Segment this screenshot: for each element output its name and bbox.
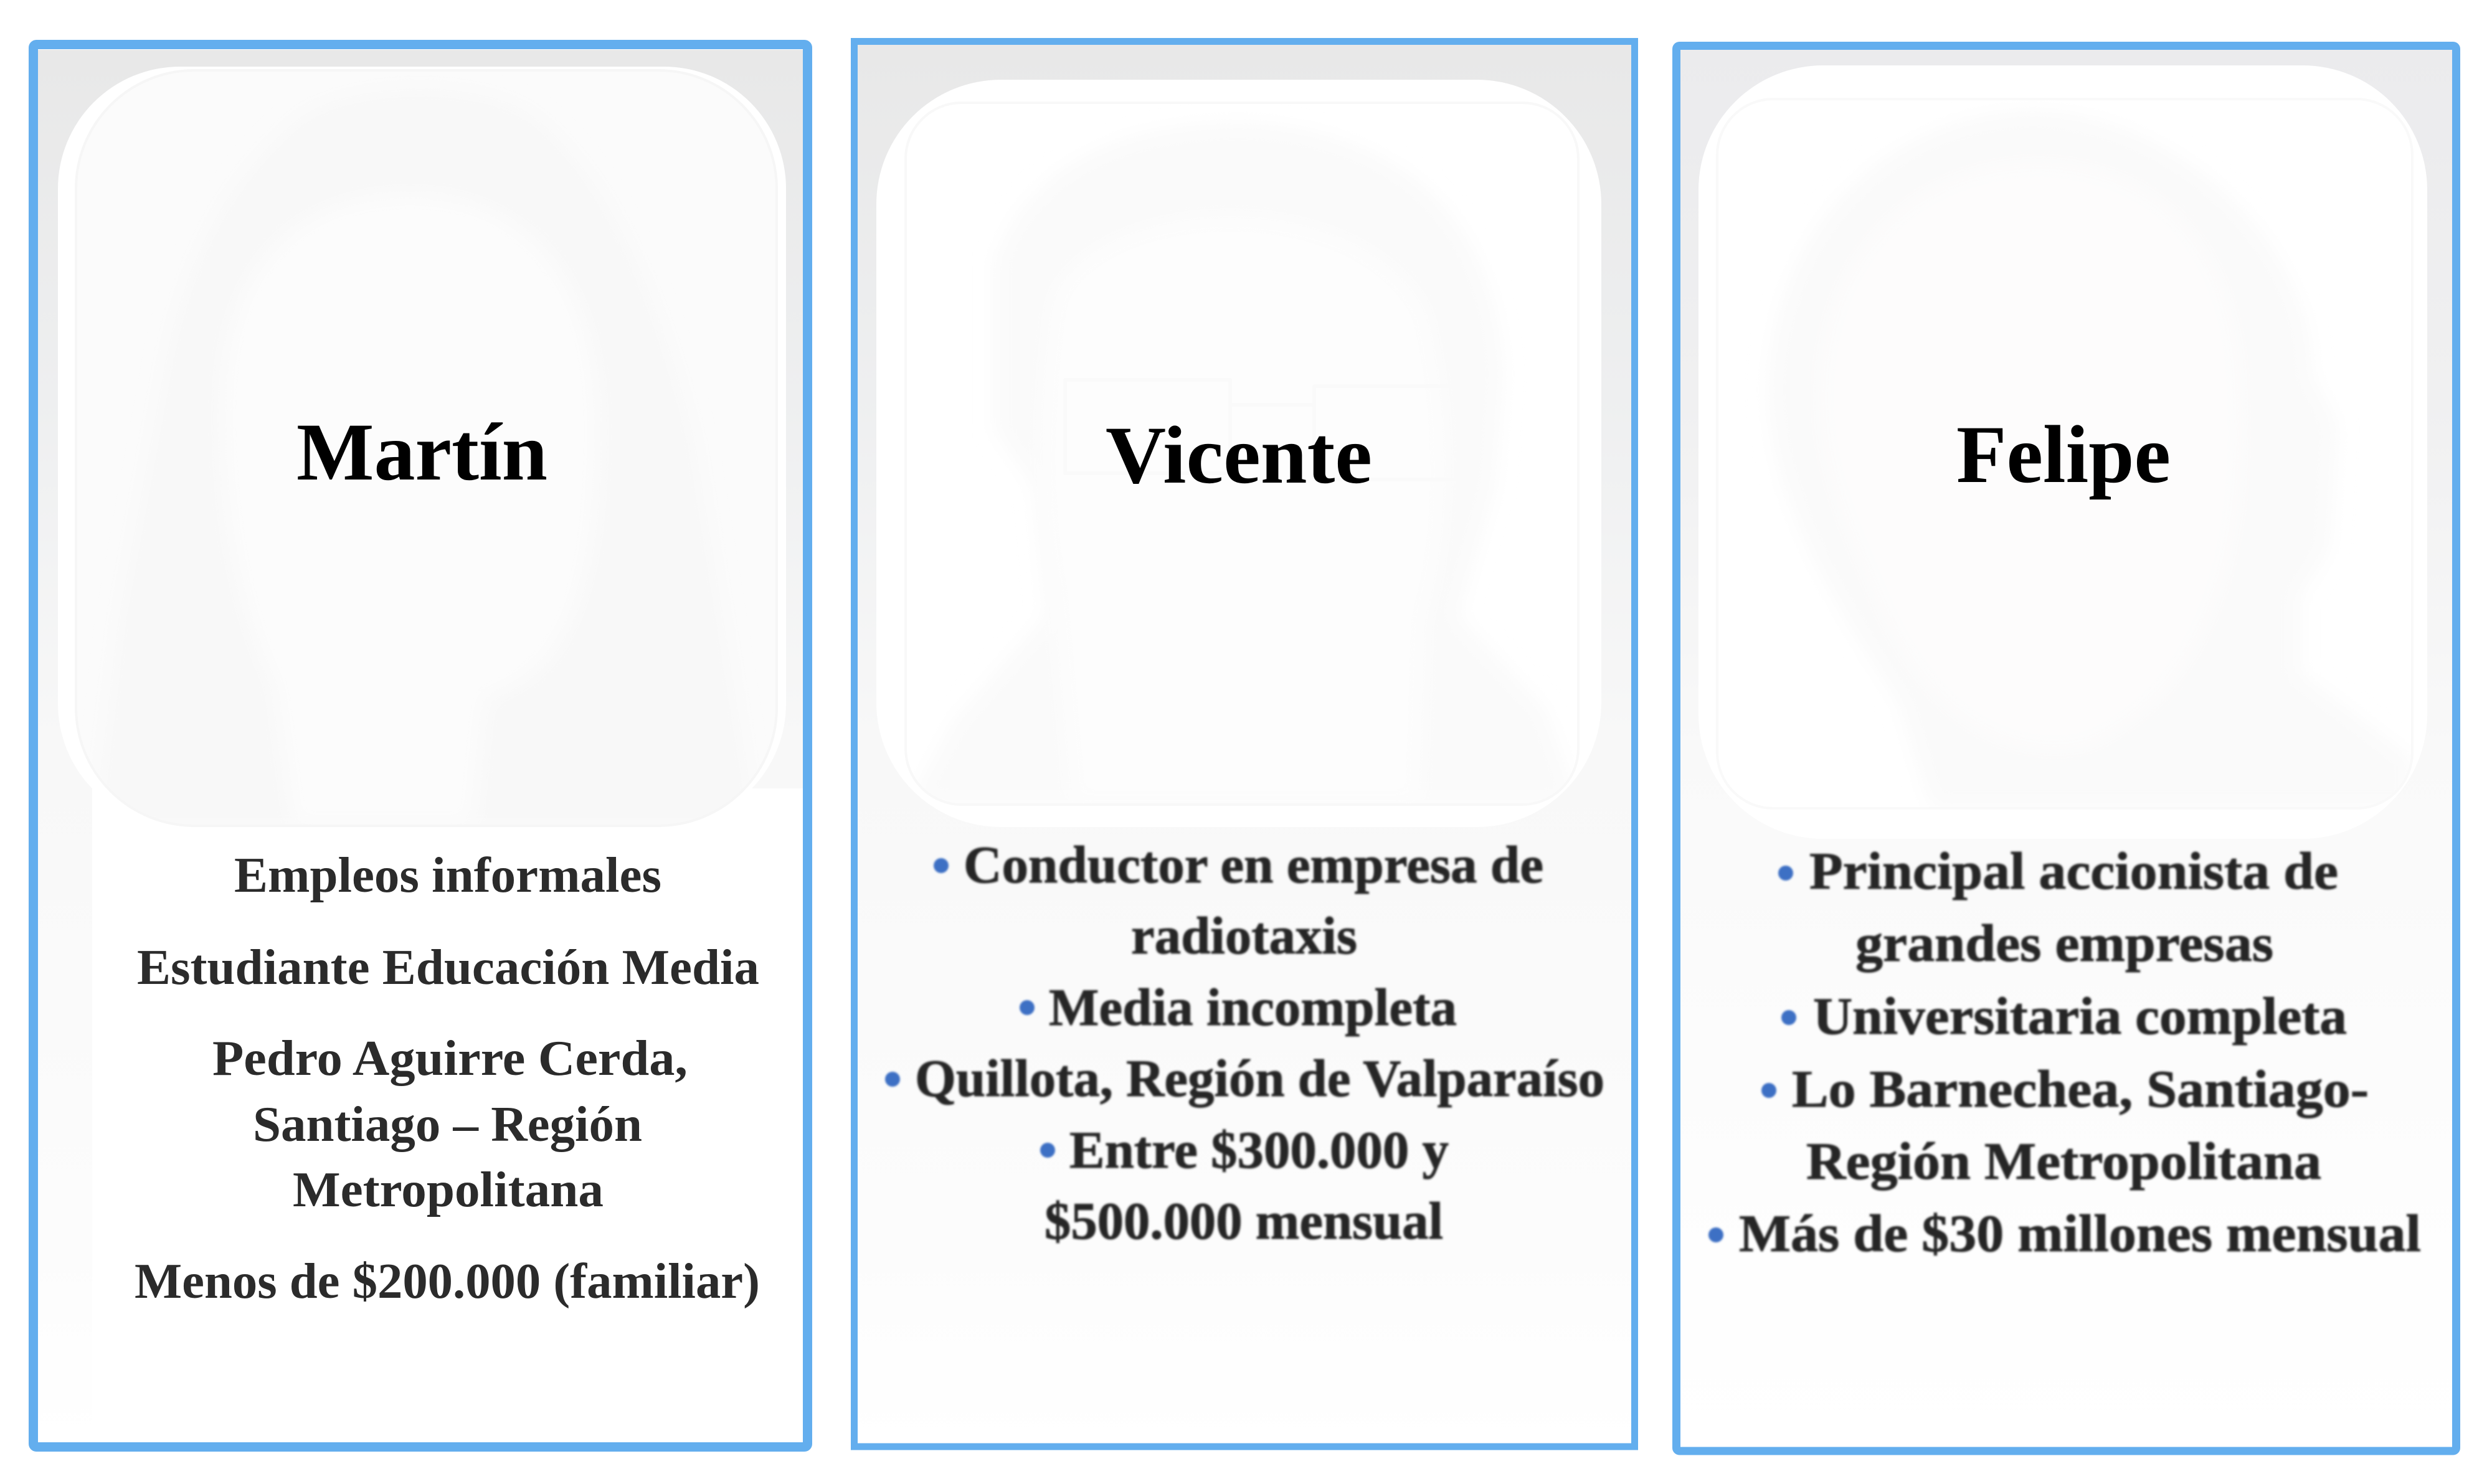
text block: Martín details: Empleos informales	[234, 847, 661, 903]
name: Vicente: Vicente	[1106, 409, 1372, 501]
text block: Felipe details: Más de $30 millones mensual	[1739, 1204, 2421, 1263]
photo frame line	[76, 70, 777, 826]
faded portrait	[76, 70, 777, 826]
text block: Vicente details	[885, 836, 1604, 1250]
text block: Felipe details: Región Metropolitana	[1806, 1132, 2321, 1191]
faded portrait	[906, 103, 1578, 805]
panel background	[37, 50, 803, 1443]
text block: Martín details	[135, 847, 760, 1309]
photo halo	[876, 80, 1601, 827]
text block: Martín details: Santiago – Región	[253, 1096, 642, 1152]
text block: Vicente details: Entre $300.000 y	[1069, 1121, 1449, 1179]
panel background	[854, 41, 1635, 1447]
panel border	[855, 41, 1634, 1447]
panel: Vicente	[854, 41, 1635, 1447]
photo frame line	[906, 103, 1578, 805]
name: Felipe: Felipe	[1956, 409, 2171, 500]
text block: Vicente details: Media incompleta	[1049, 978, 1457, 1037]
text block: Martín details: Metropolitana	[293, 1161, 604, 1217]
text block: Felipe details: grandes empresas	[1855, 914, 2273, 973]
text block: Vicente details: Conductor en empresa de	[964, 836, 1543, 894]
panel: Martín	[34, 45, 807, 1447]
panel border	[34, 45, 807, 1447]
text block: Martín details: Estudiante Educación Media	[137, 939, 759, 995]
text block: Martín details: Menos de $200.000 (familiar)	[135, 1253, 760, 1309]
text block: Felipe details	[1708, 842, 2421, 1263]
panel: Felipe	[1677, 46, 2456, 1451]
white text area	[92, 788, 803, 1443]
faded portrait	[1717, 99, 2412, 808]
text block: Vicente details: radiotaxis	[1131, 907, 1357, 965]
text block: Martín details: Pedro Aguirre Cerda,	[212, 1030, 688, 1086]
text block: Vicente details: Quillota, Región de Valparaíso	[915, 1049, 1604, 1108]
photo halo	[58, 67, 786, 826]
panel border	[1677, 46, 2456, 1451]
photo halo	[1698, 65, 2427, 839]
text block: Felipe details: Universitaria completa	[1813, 987, 2347, 1046]
photo frame line	[1717, 99, 2412, 808]
text block: Felipe details: Lo Barnechea, Santiago-	[1792, 1060, 2369, 1118]
text block: Vicente details: $500.000 mensual	[1045, 1192, 1443, 1250]
panel background	[1680, 49, 2453, 1447]
text block: Felipe details: Principal accionista de	[1809, 842, 2338, 900]
name: Martín: Martín	[296, 406, 547, 498]
